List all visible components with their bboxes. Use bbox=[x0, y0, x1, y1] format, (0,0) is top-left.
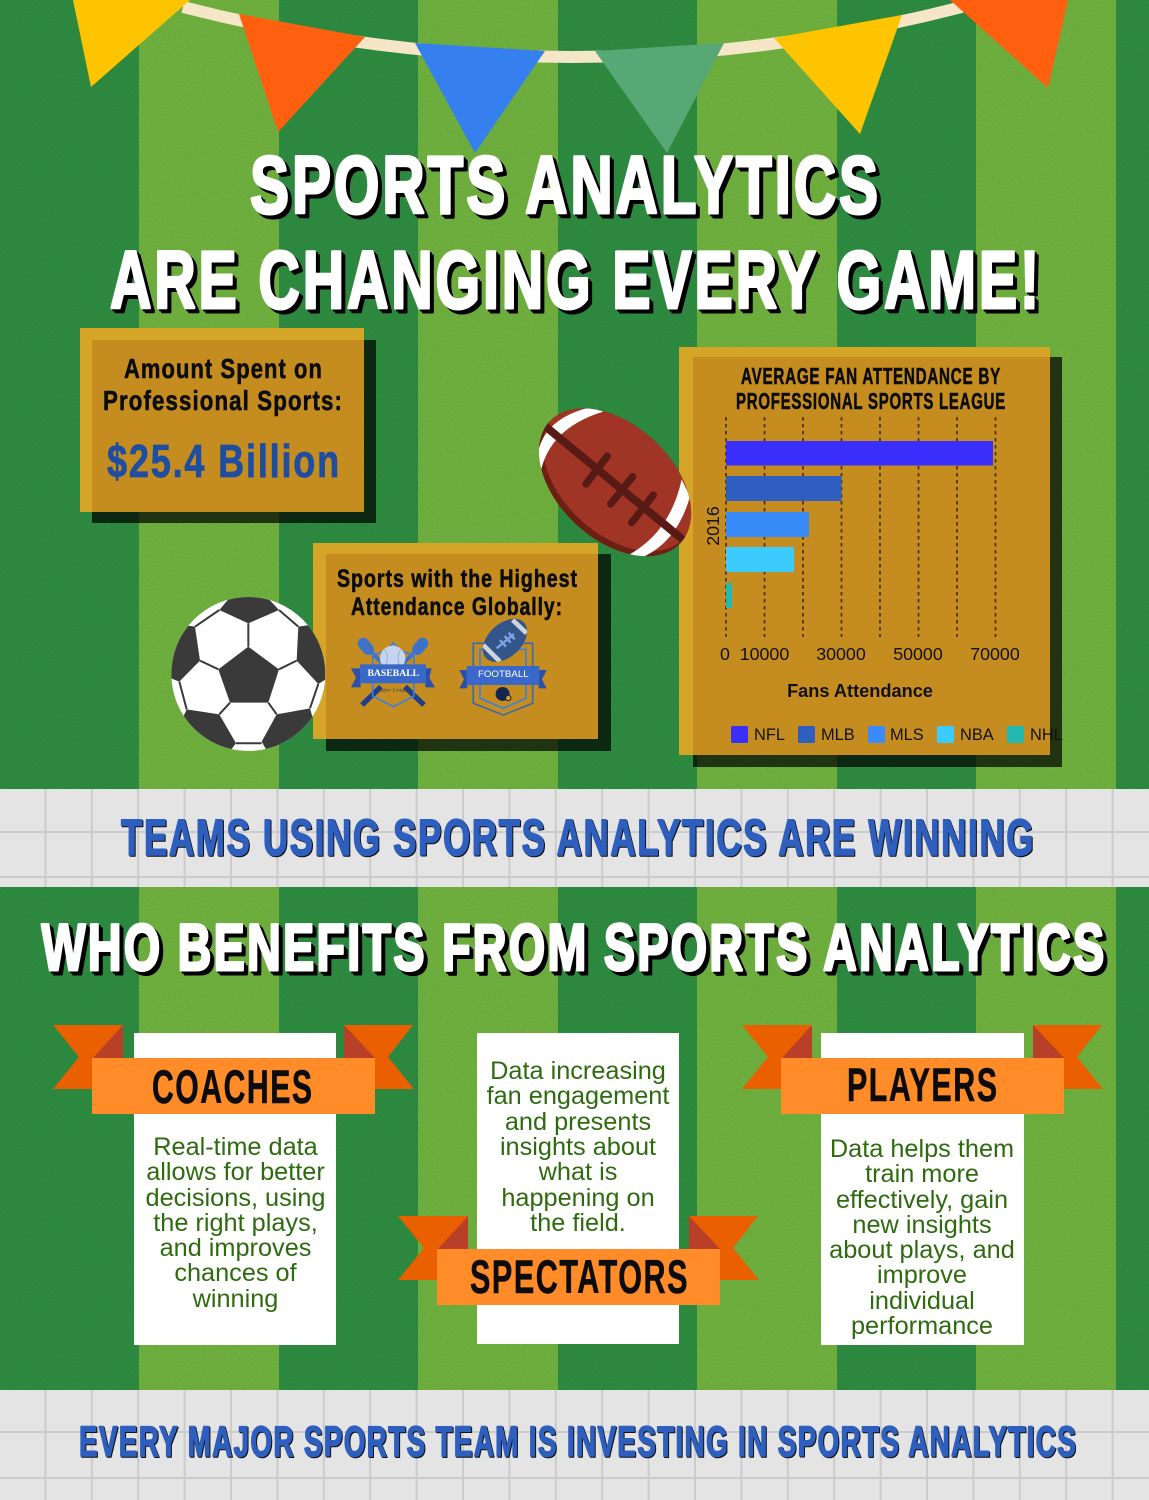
card: spectators bbox=[398, 1033, 759, 1344]
chart axis labels: 30000 bbox=[816, 644, 866, 664]
ribbon: players: PLAYERS bbox=[847, 1058, 998, 1111]
spectators text: happening on bbox=[501, 1184, 655, 1212]
icon: soccer ball bbox=[167, 593, 330, 753]
chart axis labels: 70000 bbox=[970, 644, 1020, 664]
spectators text: what is bbox=[538, 1158, 617, 1186]
players text: Data helps them bbox=[830, 1135, 1014, 1163]
spectators text: the field. bbox=[530, 1209, 626, 1237]
chart legend: NFL bbox=[754, 726, 785, 744]
chart axis labels: Fans Attendance bbox=[787, 681, 933, 701]
panel: sports with highest attendance bbox=[313, 543, 611, 751]
chart title: AVERAGE FAN ATTENDANCE BY bbox=[741, 363, 1001, 389]
chart gridlines bbox=[726, 417, 996, 637]
chart legend bbox=[731, 726, 1063, 744]
panel: sports with highest attendance: Attendance Globally: bbox=[351, 593, 563, 621]
card: players bbox=[742, 1025, 1103, 1345]
chart legend: MLS bbox=[890, 726, 924, 744]
chart axis labels: 2016 bbox=[703, 506, 723, 546]
ribbon: players bbox=[742, 1025, 1103, 1114]
chart legend: MLB bbox=[821, 726, 855, 744]
players text: improve bbox=[877, 1261, 967, 1289]
banner: every major sports team bbox=[0, 1390, 1149, 1500]
players text: performance bbox=[851, 1312, 993, 1340]
chart axis labels bbox=[703, 506, 1020, 701]
bar chart bars bbox=[726, 441, 993, 608]
panel: attendance chart bbox=[679, 347, 1063, 767]
chart title: PROFESSIONAL SPORTS LEAGUE bbox=[736, 388, 1006, 414]
icon: football badge: FOOTBALL bbox=[478, 669, 529, 679]
chart legend: NHL bbox=[1030, 726, 1063, 744]
card: coaches bbox=[53, 1025, 414, 1345]
ribbon: coaches bbox=[53, 1025, 414, 1114]
chart legend: NBA bbox=[960, 726, 994, 744]
ribbon: coaches: COACHES bbox=[152, 1060, 314, 1113]
icon: baseball badge: BASEBALL bbox=[367, 668, 419, 678]
coaches text: chances of bbox=[174, 1259, 298, 1287]
players text: train more bbox=[865, 1160, 979, 1188]
panel: amount spent bbox=[80, 328, 376, 523]
icon: american football bbox=[538, 408, 692, 556]
players text: about plays, and bbox=[829, 1236, 1015, 1264]
players text: individual bbox=[869, 1287, 975, 1315]
banner: teams using sports analytics bbox=[0, 789, 1149, 887]
spectators text: Data increasing bbox=[490, 1057, 666, 1085]
icon: baseball badge: Major League bbox=[376, 688, 410, 694]
title bbox=[110, 140, 1042, 326]
chart axis labels: 50000 bbox=[893, 644, 943, 664]
bunting: string of pennant flags bbox=[73, 0, 1068, 153]
players text bbox=[829, 1135, 1015, 1340]
chart axis labels: 10000 bbox=[740, 644, 789, 664]
coaches text: allows for better bbox=[146, 1158, 325, 1186]
coaches text: decisions, using bbox=[146, 1184, 326, 1212]
coaches text: Real-time data bbox=[153, 1133, 319, 1161]
spectators text: fan engagement bbox=[487, 1082, 669, 1110]
spectators text: and presents bbox=[505, 1108, 651, 1136]
chart title bbox=[736, 363, 1006, 414]
ribbon: spectators: SPECTATORS bbox=[470, 1250, 689, 1303]
panel: sports with highest attendance: Sports with the Highest bbox=[337, 565, 578, 593]
spectators text bbox=[487, 1057, 669, 1237]
coaches text: and improves bbox=[160, 1234, 311, 1262]
title: SPORTS ANALYTICS bbox=[250, 140, 881, 231]
panel: amount spent: Professional Sports: bbox=[103, 385, 343, 416]
coaches text: the right plays, bbox=[153, 1209, 318, 1237]
coaches text bbox=[146, 1133, 326, 1313]
panel: amount spent: Amount Spent on bbox=[124, 353, 323, 384]
players text: effectively, gain bbox=[836, 1186, 1008, 1214]
icon: baseball badge bbox=[351, 643, 435, 707]
coaches text: winning bbox=[192, 1285, 278, 1313]
ribbon: spectators bbox=[398, 1216, 759, 1305]
chart axis labels: 0 bbox=[720, 644, 730, 664]
icon: football badge bbox=[459, 610, 547, 715]
players text: new insights bbox=[852, 1211, 992, 1239]
panel: amount spent: $25.4 Billion bbox=[107, 435, 341, 487]
spectators text: insights about bbox=[500, 1133, 656, 1161]
